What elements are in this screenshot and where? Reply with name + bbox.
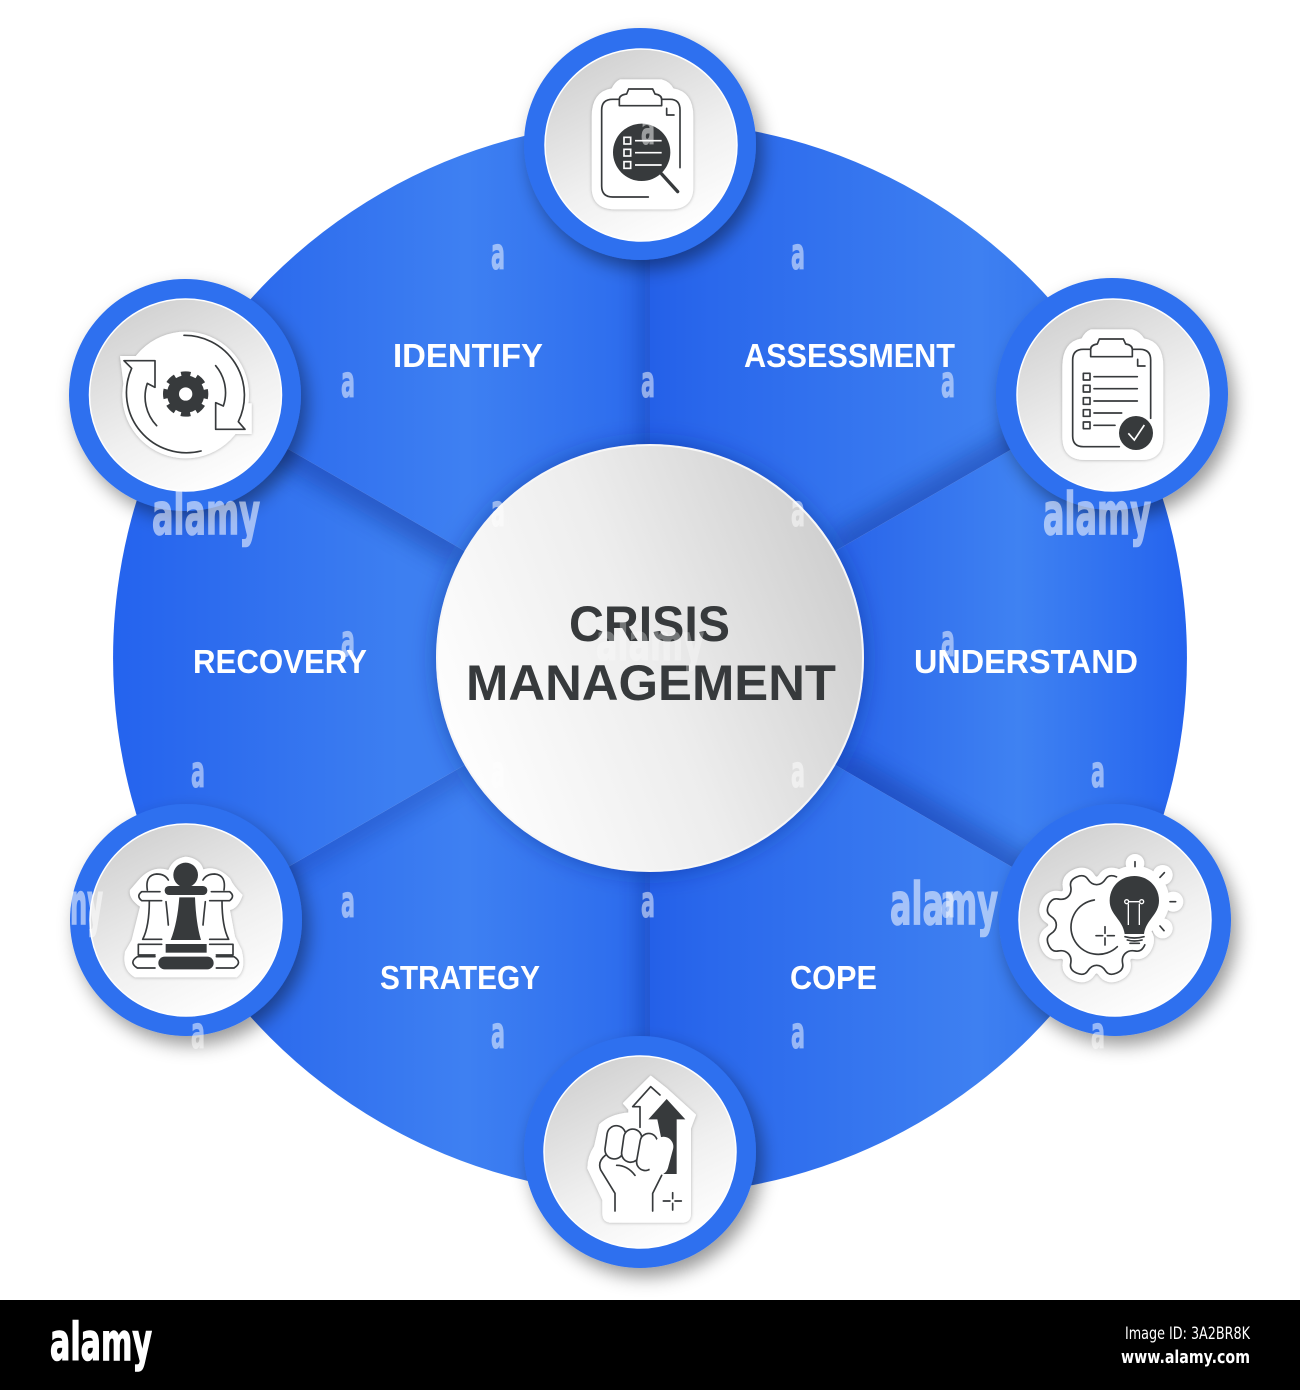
watermark: alamy marks: a — [941, 357, 955, 408]
segment: understand — [650, 390, 1187, 926]
watermark: alamy marks: alamy — [890, 870, 998, 938]
node: chess pawns (lower left) — [70, 804, 302, 1036]
label: assessment: ASSESSMENT — [744, 337, 955, 374]
watermark: alamy marks: a — [791, 1008, 805, 1059]
watermark: alamy marks: a — [491, 1008, 505, 1059]
icon: raised fist with arrow — [588, 1077, 695, 1222]
watermark: alamy marks: a — [491, 229, 505, 280]
watermark: alamy marks: a — [641, 877, 655, 928]
label: cope: COPE — [790, 959, 877, 996]
node: checklist (upper right) — [996, 278, 1228, 510]
title — [466, 596, 836, 711]
watermark: alamy marks: a — [641, 104, 655, 155]
watermark: alamy marks: a — [191, 1008, 205, 1059]
center disc — [437, 445, 863, 871]
node: fist and arrow (bottom) — [524, 1036, 756, 1268]
icon: gear with light bulb — [1047, 854, 1183, 974]
footer image id: Image ID: 3A2BR8K — [1125, 1324, 1251, 1344]
watermark: alamy marks: a — [1091, 1008, 1105, 1059]
watermark: alamy marks: a — [341, 616, 355, 667]
label: recovery: RECOVERY — [193, 643, 367, 680]
icon: clipboard with check mark — [1062, 329, 1163, 460]
watermark: alamy marks: alamy — [1043, 480, 1151, 548]
segment: recovery — [113, 390, 650, 926]
footer bar — [0, 1300, 1300, 1390]
watermark: alamy marks: a — [791, 486, 805, 537]
title: CRISIS — [569, 596, 730, 652]
watermark: alamy marks: a — [791, 747, 805, 798]
icon: chess pieces — [124, 857, 243, 977]
title: MANAGEMENT — [466, 655, 836, 711]
watermark: alamy marks: a — [791, 229, 805, 280]
segment: strategy — [185, 658, 650, 1195]
watermark: alamy marks — [70, 104, 1151, 1059]
watermark: alamy marks: a — [341, 877, 355, 928]
icon: rotating arrows around gear — [120, 332, 252, 458]
watermark: alamy marks: a — [341, 357, 355, 408]
watermark: alamy marks: a — [1091, 747, 1105, 798]
segment: assessment — [650, 121, 1115, 658]
hexagonal wheel of six segments — [113, 121, 1187, 1195]
node: gear cycle (upper left) — [69, 279, 301, 511]
watermark: alamy marks: a — [941, 877, 955, 928]
watermark: alamy marks: alamy — [596, 614, 704, 672]
segment: identify — [185, 121, 650, 658]
node: gear and bulb (lower right) — [999, 804, 1231, 1036]
watermark: alamy marks: alamy — [152, 480, 260, 548]
segment: cope — [650, 658, 1115, 1195]
footer url: www.alamy.com — [1121, 1347, 1250, 1368]
label: understand: UNDERSTAND — [914, 643, 1138, 680]
watermark: alamy marks: a — [491, 747, 505, 798]
label: identify: IDENTIFY — [393, 337, 543, 374]
watermark: alamy marks: a — [191, 747, 205, 798]
watermark: alamy marks: a — [491, 486, 505, 537]
node: assessment clipboard (top) — [524, 28, 756, 260]
watermark: alamy marks: ny — [70, 870, 103, 938]
watermark: alamy marks: a — [641, 357, 655, 408]
watermark: alamy marks: a — [941, 616, 955, 667]
footer logo: alamy — [50, 1313, 152, 1373]
label: strategy: STRATEGY — [380, 959, 540, 996]
icon: clipboard with magnifier — [592, 79, 693, 209]
